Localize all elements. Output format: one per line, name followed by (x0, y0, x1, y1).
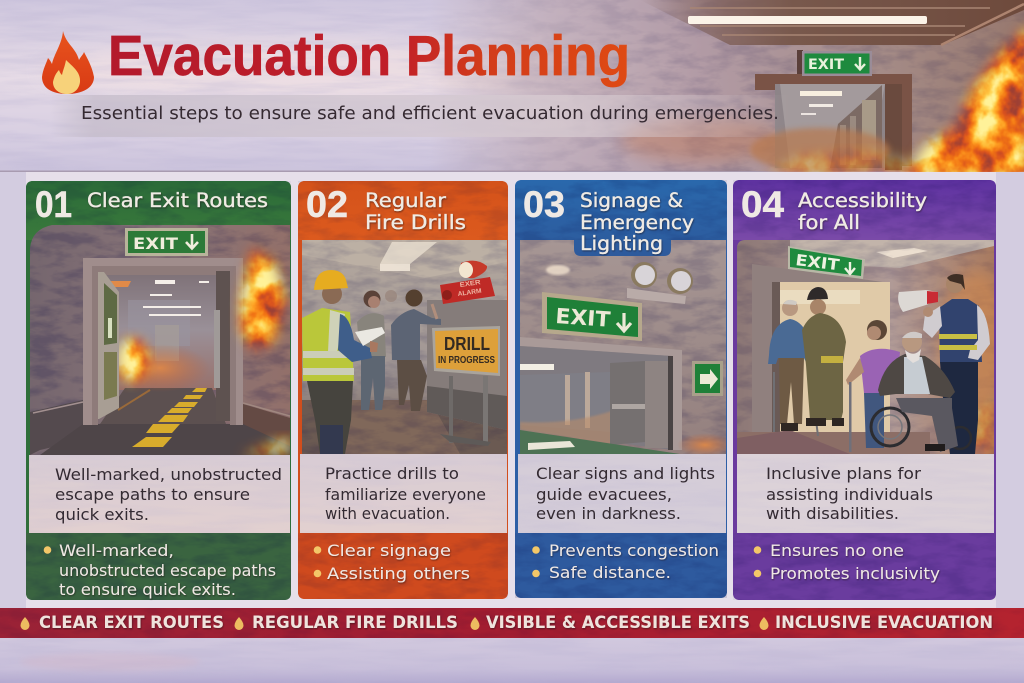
ceiling (640, 0, 1024, 45)
person in grey jacket (357, 290, 397, 410)
panel: 02 regular fire drills (298, 181, 508, 599)
panel 1 header (26, 181, 291, 240)
ceiling light (688, 16, 927, 24)
panel 1 exit sign: EXIT (133, 234, 178, 253)
drill sign: DRILL (444, 334, 490, 354)
panel 4 bullets: Ensures no one (770, 541, 904, 560)
emergency lights (627, 262, 693, 304)
exit sign (542, 292, 642, 341)
panel 1 description: Well-marked, unobstructed (55, 465, 282, 484)
panel 2 bullets: Assisting others (327, 564, 470, 583)
panel 2 description: with evacuation. (325, 504, 450, 523)
panel 3 header: Signage & (580, 189, 683, 212)
official with megaphone (898, 274, 990, 454)
ribbon labels: INCLUSIVE EVACUATION (775, 613, 993, 633)
subtitle band (50, 95, 790, 137)
door surround (520, 337, 682, 450)
icon: ribbon flames (20, 617, 768, 630)
exit sign (797, 50, 872, 76)
doorway (750, 74, 912, 172)
panel 4 description: assisting individuals (766, 485, 933, 504)
wainscot (30, 400, 83, 455)
drill sign: IN PROGRESS (438, 354, 495, 366)
panel 1 bullets: Well-marked, (59, 541, 174, 560)
panel 1 header: Clear Exit Routes (87, 189, 268, 212)
panel: 03 signage and emergency lighting (515, 180, 733, 598)
panel 4 bullets: Promotes inclusivity (770, 564, 940, 583)
yellow floor dashes (132, 388, 207, 447)
panel 1 description: quick exits. (55, 505, 149, 524)
door frame (83, 258, 243, 425)
panel 2 description (300, 454, 507, 533)
exit sign: EXIT (555, 304, 612, 332)
panel 2 bullets: Clear signage (327, 541, 451, 560)
panel 3 description: guide evacuees, (536, 485, 672, 504)
small arrow sign (692, 361, 723, 396)
panel 1 illustration (30, 225, 290, 455)
title block (42, 24, 790, 137)
panel 3 header: Lighting (580, 232, 663, 255)
exit sign: EXIT (808, 57, 844, 73)
panel 1 header: 01 (35, 184, 72, 225)
person in wheelchair (871, 332, 971, 452)
panel 3 illustration (520, 240, 733, 457)
panel 4 exit sign (788, 246, 865, 279)
icon: flame (42, 31, 94, 94)
ribbon labels: CLEAR EXIT ROUTES (39, 613, 224, 633)
panel 4 description (737, 454, 994, 533)
panel 2 description: familiarize everyone (325, 485, 486, 504)
panel 3 description (518, 454, 726, 533)
floor (40, 424, 290, 455)
panel 3 header: Emergency (580, 211, 694, 234)
panel 3 bullets (515, 533, 727, 598)
subtitle: Essential steps to ensure safe and efficient evacuation during emergencies. (81, 103, 779, 124)
panel 4 header (733, 180, 996, 240)
older man with crutches (768, 300, 818, 436)
panel 3 bullets: Prevents congestion (549, 541, 719, 560)
panel 4 header: for All (798, 211, 860, 234)
fire on wall (240, 248, 286, 352)
fire inside door (117, 338, 149, 382)
panel 1 bullets: unobstructed escape paths (59, 561, 276, 580)
panel 2 header (298, 181, 508, 240)
ribbon labels: VISIBLE & ACCESSIBLE EXITS (486, 613, 750, 633)
door leaf (98, 272, 119, 419)
fire on right of header (760, 25, 1024, 178)
panel 2 header: 02 (306, 184, 348, 225)
panel 4 header: Accessibility (798, 189, 927, 212)
panel 3 header (515, 180, 727, 256)
woman with cane (846, 320, 900, 452)
worker in vest (302, 270, 385, 454)
firefighter (802, 287, 846, 426)
panel 3 bullets: Safe distance. (549, 563, 671, 582)
alarm with beacon: ALARM (457, 288, 482, 298)
drill sign (432, 326, 500, 446)
panel 4 bullets (733, 533, 996, 600)
panel 4 header: 04 (741, 184, 784, 225)
panel 1 description (29, 455, 290, 533)
corridor (107, 275, 216, 390)
panel 4 description: with disabilities. (766, 504, 899, 523)
panel: 04 accessibility for all (733, 180, 1010, 600)
person in blue jacket (391, 290, 441, 411)
panel 2 header: Regular (365, 189, 447, 212)
header scene: corridor with exit sign and fire (430, 0, 1024, 178)
panel 2 illustration (302, 240, 507, 454)
right wall (427, 300, 507, 430)
panel 3 description: Clear signs and lights (536, 464, 715, 483)
lobby (520, 346, 672, 450)
title: Evacuation Planning (108, 24, 630, 88)
doorway (752, 264, 890, 432)
panel 2 header: Fire Drills (365, 211, 466, 234)
green floor (520, 430, 680, 454)
panel 4 description: Inclusive plans for (766, 464, 921, 483)
panel 1 bullets: to ensure quick exits. (59, 580, 236, 599)
panel 4 illustration (737, 240, 1010, 454)
panel 3 description: even in darkness. (536, 504, 681, 523)
panel 2 bullets (298, 533, 508, 599)
panel 3 header: 03 (523, 184, 565, 225)
panel 1 bullets (26, 533, 291, 600)
alarm with beacon (440, 261, 495, 304)
panel 4 exit sign: EXIT (795, 251, 841, 274)
panel 1 exit sign (125, 228, 208, 256)
ribbon labels: REGULAR FIRE DRILLS (252, 613, 458, 633)
bottom ribbon (0, 608, 1024, 638)
panel 1 description: escape paths to ensure (55, 485, 250, 504)
alarm with beacon: EXER (459, 279, 481, 289)
panel: 01 clear exit routes (26, 181, 291, 600)
panel 2 description: Practice drills to (325, 464, 459, 483)
